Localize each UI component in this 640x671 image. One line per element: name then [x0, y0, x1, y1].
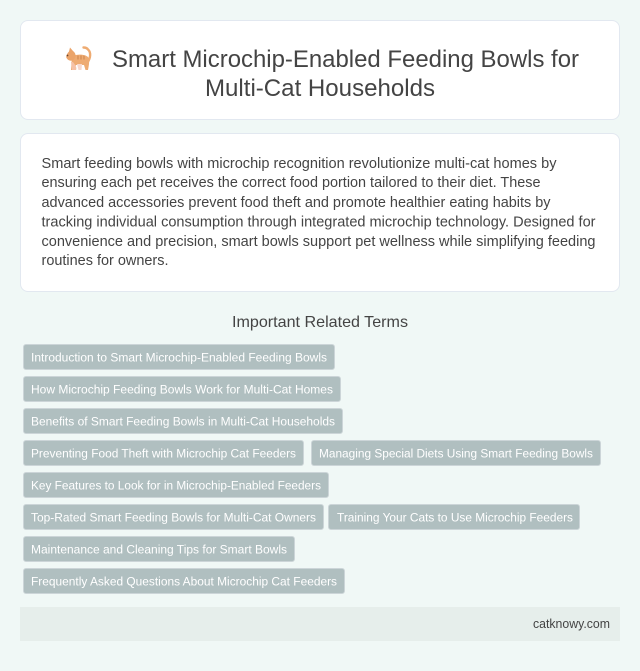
description text: tracking individual consumption through integrated microchip technology. Designed for	[42, 214, 596, 230]
tag: food theft	[23, 440, 304, 466]
description text: convenience and precision, smart bowls support pet wellness while simplifying feeding	[42, 234, 596, 250]
tag: maintenance: Maintenance and Cleaning Tips for Smart Bowls	[31, 542, 287, 556]
footer source: catknowy.com	[533, 617, 610, 631]
title: Smart Microchip-Enabled Feeding Bowls for	[112, 46, 579, 73]
tag: special diets: Managing Special Diets Using Smart Feeding Bowls	[319, 446, 593, 460]
tag: key features: Key Features to Look for in Microchip-Enabled Feeders	[31, 478, 321, 492]
description text: advanced accessories prevent food theft and promote healthier eating habits by	[42, 195, 551, 211]
tag: faq: Frequently Asked Questions About Microchip Cat Feeders	[31, 574, 337, 588]
tag: special diets	[311, 440, 601, 466]
description text: ensuring each pet receives the correct food portion tailored to their diet. These	[42, 175, 540, 191]
description card	[20, 133, 620, 292]
tag: maintenance	[23, 536, 295, 562]
tag: top-rated: Top-Rated Smart Feeding Bowls for Multi-Cat Owners	[31, 510, 316, 524]
tag: top-rated	[23, 504, 324, 530]
icon: cat	[66, 48, 90, 70]
tag: faq	[23, 568, 345, 594]
related terms heading: Important Related Terms	[232, 314, 408, 331]
description text: Smart feeding bowls with microchip recognition revolutionize multi-cat homes by	[42, 156, 557, 172]
description text	[42, 156, 596, 269]
footer bar	[20, 607, 620, 641]
title	[112, 46, 579, 102]
title: Multi-Cat Households	[205, 75, 435, 102]
tag: training	[328, 504, 580, 530]
tag: training: Training Your Cats to Use Microchip Feeders	[337, 510, 573, 524]
tag: how it works	[23, 376, 341, 402]
tag: benefits	[23, 408, 343, 434]
tag: introduction: Introduction to Smart Microchip-Enabled Feeding Bowls	[31, 350, 327, 364]
header card	[20, 20, 620, 120]
tag: introduction	[23, 344, 335, 370]
tag: how it works: How Microchip Feeding Bowls Work for Multi-Cat Homes	[31, 382, 333, 396]
tag: food theft: Preventing Food Theft with Microchip Cat Feeders	[31, 446, 296, 460]
tag: key features	[23, 472, 329, 498]
tag: benefits: Benefits of Smart Feeding Bowls in Multi-Cat Households	[31, 414, 335, 428]
description text: routines for owners.	[42, 253, 168, 269]
